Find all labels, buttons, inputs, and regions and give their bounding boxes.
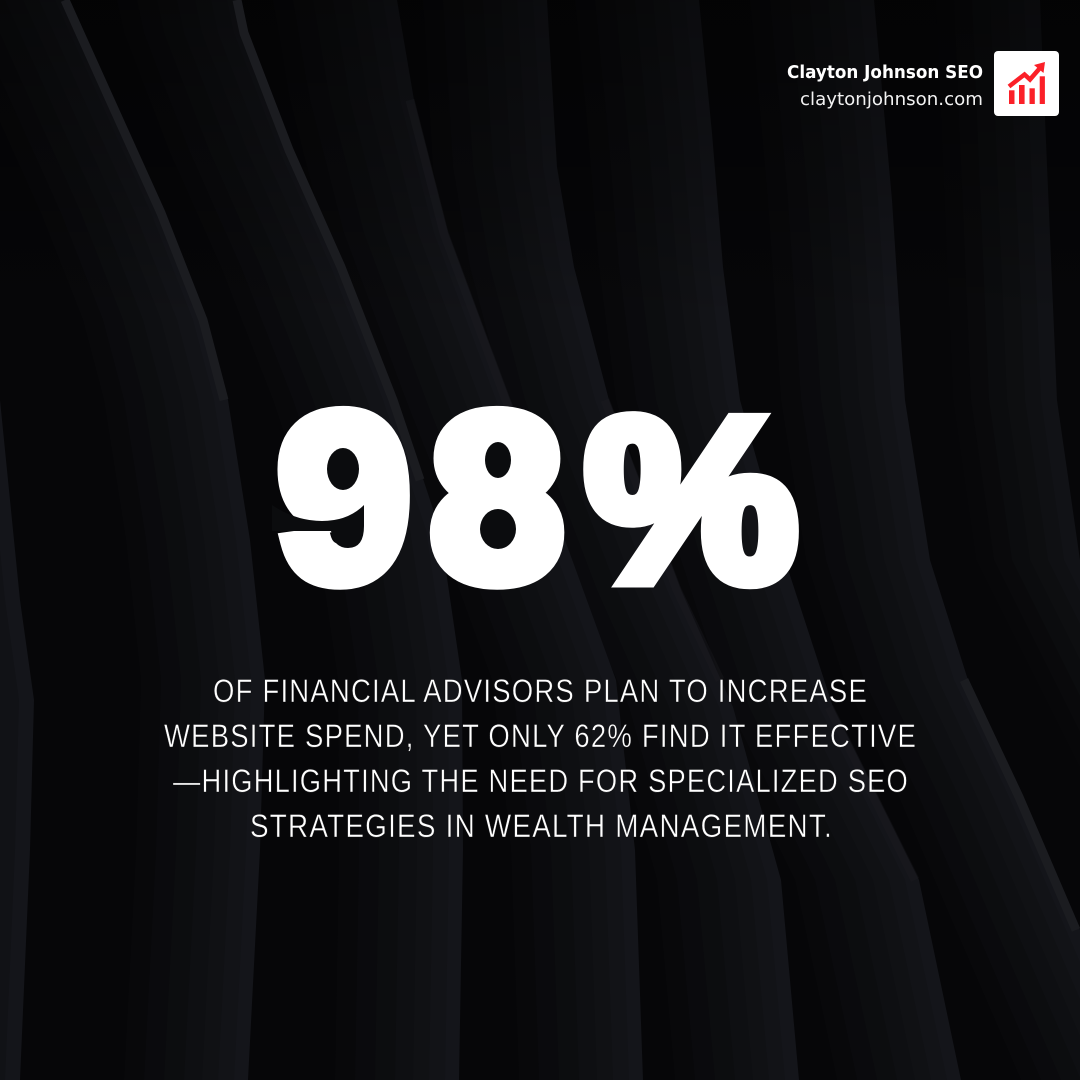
digits 98: 98 [280, 369, 561, 626]
website: claytonjohnson.com [800, 89, 983, 110]
line 3: —HIGHLIGHTING THE NEED FOR SPECIALIZED SEO [173, 763, 909, 799]
description text [164, 673, 917, 844]
line 2: WEBSITE SPEND, YET ONLY 62% FIND IT EFFECTIVE [164, 718, 917, 754]
line 4: STRATEGIES IN WEALTH MANAGEMENT. [250, 808, 833, 844]
digit counters and tail notch [272, 442, 516, 549]
brand name and website [787, 62, 983, 110]
icon: red growth chart on white tile [994, 51, 1059, 116]
line 1: OF FINANCIAL ADVISORS PLAN TO INCREASE [213, 673, 868, 709]
percent sign: % [585, 370, 797, 629]
brand name: Clayton Johnson SEO [787, 62, 983, 83]
big statistic: 98% [272, 369, 797, 629]
